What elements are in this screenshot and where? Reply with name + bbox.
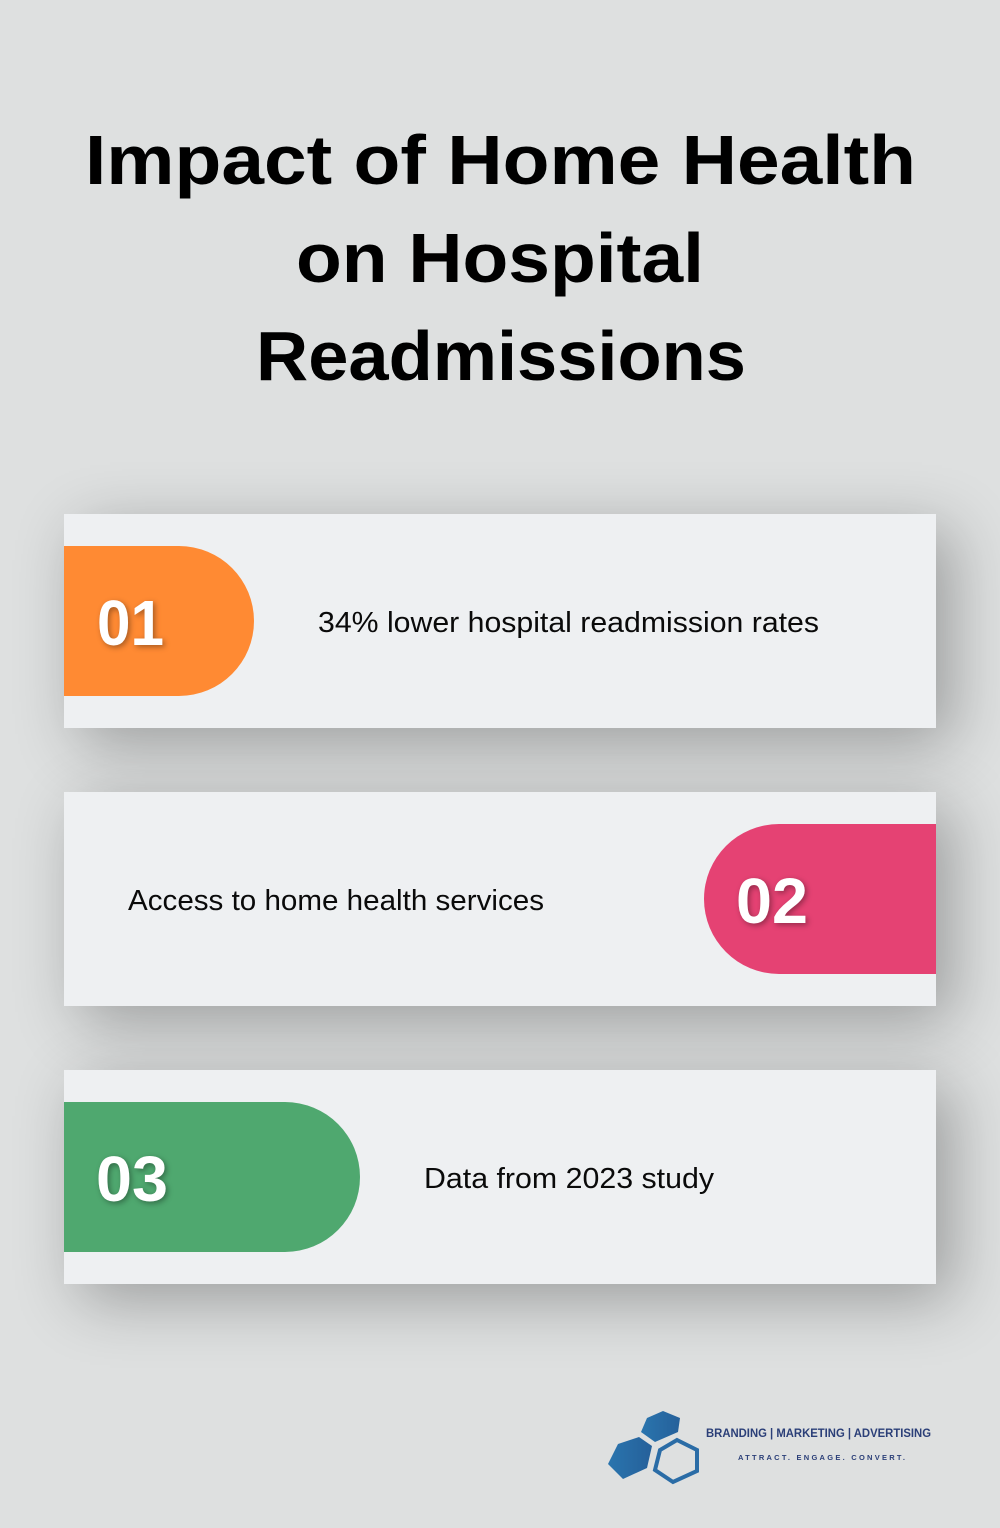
text: 34% lower hospital readmission rates: 34% lower hospital readmission rates bbox=[318, 607, 819, 639]
text: Data from 2023 study: Data from 2023 study bbox=[424, 1163, 715, 1195]
badge: 01 bbox=[64, 546, 254, 696]
icon: hexagons bbox=[608, 1411, 697, 1482]
logo bbox=[608, 1411, 931, 1484]
badge: 02: 02 bbox=[736, 865, 808, 937]
logo text bbox=[706, 1428, 931, 1462]
panel: card 01 bbox=[64, 514, 936, 728]
panel: card 02 bbox=[64, 792, 936, 1006]
title bbox=[85, 121, 916, 395]
title: Readmissions bbox=[256, 317, 746, 395]
title: Impact of Home Health bbox=[85, 121, 916, 199]
badge: 02 bbox=[704, 824, 936, 974]
badge: 03: 03 bbox=[96, 1143, 168, 1215]
logo text: BRANDING | MARKETING | ADVERTISING bbox=[706, 1428, 931, 1440]
title: on Hospital bbox=[296, 219, 704, 297]
badge: 03 bbox=[64, 1102, 360, 1252]
logo text: ATTRACT. ENGAGE. CONVERT. bbox=[738, 1453, 905, 1462]
badge: 01: 01 bbox=[97, 587, 164, 659]
panel: card 03 bbox=[64, 1070, 936, 1284]
text: Access to home health services: Access to home health services bbox=[128, 885, 544, 917]
